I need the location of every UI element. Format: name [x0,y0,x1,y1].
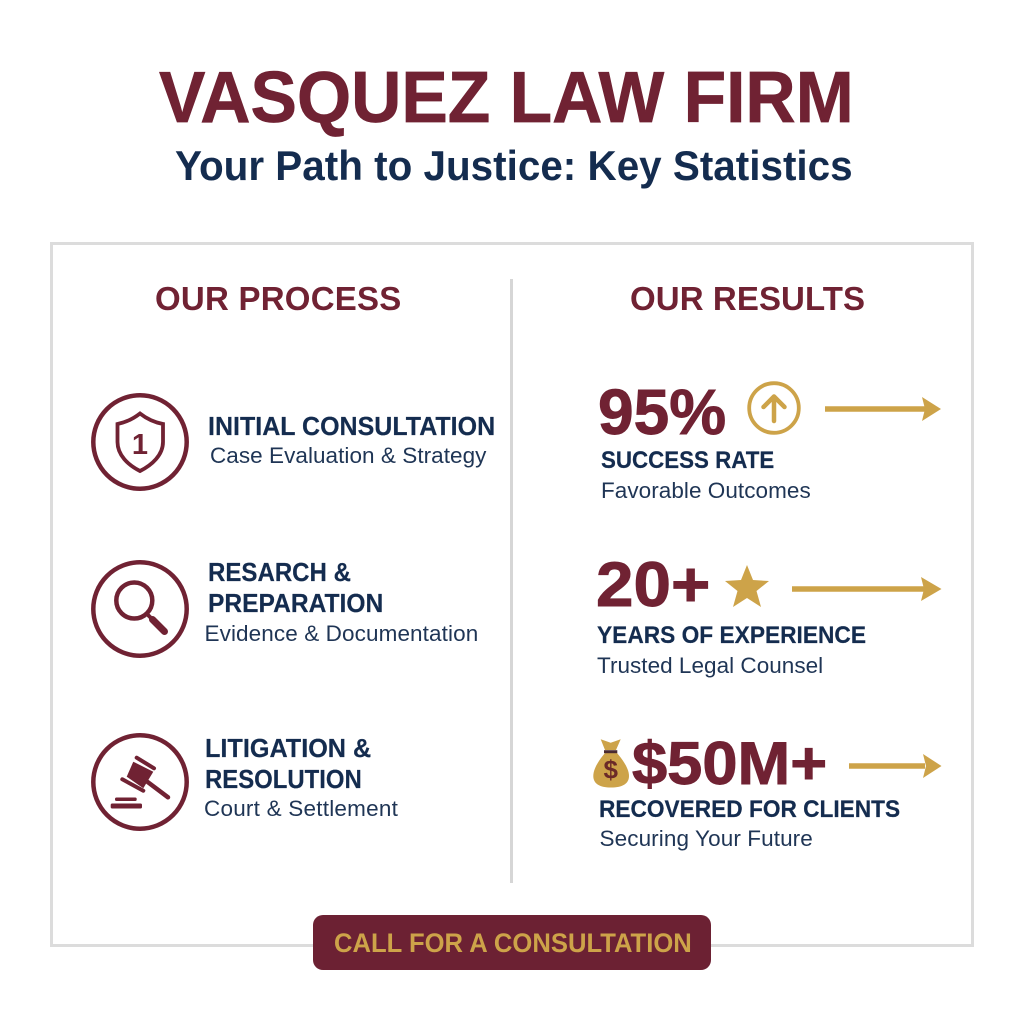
icon: money bag: $ [603,754,618,784]
call to action button [313,915,711,970]
step 3 title: RESOLUTION [205,764,362,794]
result 1 [598,376,941,502]
result 1 description: Favorable Outcomes [601,478,811,502]
stat: 95%: 95% [598,376,726,448]
step 1 title: INITIAL CONSULTATION [208,411,495,441]
step 2 description: Evidence & Documentation [204,621,478,646]
subtitle: Your Path to Justice: Key Statistics [175,142,853,189]
process step 1 [91,393,495,491]
icon: magnifying glass [91,560,189,658]
heading: our results: OUR RESULTS [630,280,865,317]
center divider [510,279,513,883]
icon: shield [91,393,189,491]
result 3 [593,730,942,851]
step 1 description: Case Evaluation & Strategy [210,443,486,468]
step 2 title: RESARCH & [208,557,351,587]
arrow [849,754,942,778]
step 2 title: PREPARATION [208,588,383,618]
step 3 title: LITIGATION & [205,732,371,762]
result 3 description: Securing Your Future [600,826,813,851]
step 3 title [205,732,371,794]
icon: money bag [593,739,629,788]
arrow [792,577,942,601]
stat: $50M+: $50M+ [632,730,827,797]
button label: CALL FOR A CONSULTATION [334,928,692,958]
process step 2 [91,557,478,658]
result 3 label: RECOVERED FOR CLIENTS [598,796,900,822]
result 2 [596,550,942,678]
heading: our process: OUR PROCESS [155,280,402,317]
icon: shield: 1 [132,429,148,461]
step 3 description: Court & Settlement [204,796,398,820]
process step 3 [91,732,398,831]
result 1 label: SUCCESS RATE [601,447,774,474]
icon: gavel [91,733,189,831]
result 2 description: Trusted Legal Counsel [597,652,823,678]
main panel [50,242,974,947]
title: VASQUEZ LAW FIRM [159,56,854,138]
result 2 label: YEARS OF EXPERIENCE [597,622,866,648]
arrow [825,397,941,421]
step 2 title [208,557,383,618]
icon: star [725,565,769,607]
icon: up arrow circle [747,381,801,435]
stat: 20+: 20+ [596,550,710,620]
